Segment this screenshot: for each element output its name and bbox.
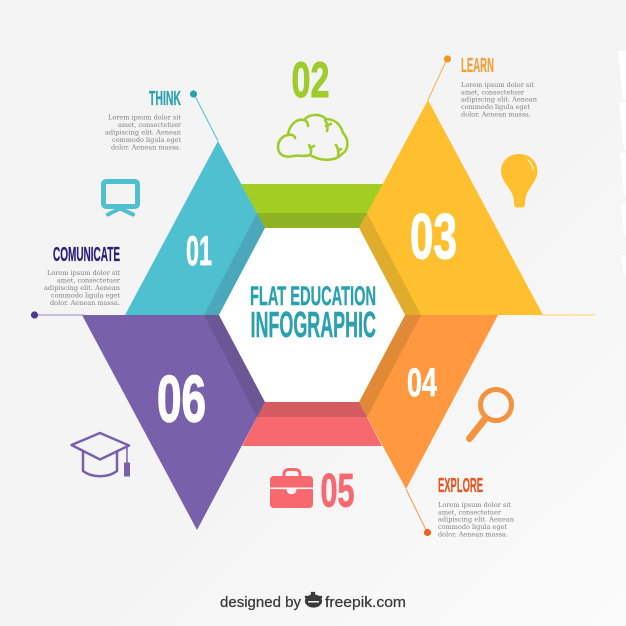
text: EXPLORE — [438, 475, 483, 497]
number 01: 01 — [186, 227, 212, 274]
text block: think: commodo ligula eget — [112, 136, 181, 144]
footer: attribution — [220, 592, 406, 611]
text block: communicate: adipiscing elit. Aenean — [44, 284, 121, 292]
connector: learn — [428, 55, 451, 100]
icon: freepik logo — [305, 592, 322, 608]
connector: think — [190, 90, 218, 141]
text block: explore: adipiscing elit. Aenean — [438, 516, 515, 524]
panel: 06 communicate purple triangle — [82, 315, 265, 530]
title — [250, 281, 376, 345]
connector: explore — [406, 489, 431, 536]
text block: think: adipiscing elit. Aenean — [105, 128, 182, 136]
text block: think: dolor. Aenean massa. — [111, 144, 181, 152]
text block: think: Lorem ipsum dolor sit — [108, 114, 181, 122]
number 04: 04 — [407, 361, 438, 405]
text block: learn: adipiscing elit. Aenean — [461, 96, 538, 104]
panel: 05 pink trapezoid — [242, 402, 382, 446]
number 05: 05 — [320, 464, 354, 516]
footer: attribution: freepik.com — [325, 595, 406, 611]
text block: learn: dolor. Aenean massa. — [461, 110, 531, 118]
text: LEARN — [461, 55, 494, 77]
heading: think: THINK — [149, 88, 181, 110]
text block: communicate: Lorem ipsum dolor sit — [47, 269, 120, 277]
text block: explore — [438, 501, 515, 538]
text block: explore: amet, consectetuer — [438, 508, 502, 516]
panel: 03 learn yellow triangle — [359, 100, 543, 315]
text block: explore: dolor. Aenean massa. — [438, 530, 508, 538]
text block: learn: commodo ligula eget — [461, 103, 530, 111]
title: FLAT EDUCATION — [250, 281, 376, 311]
icon: magnifier — [470, 390, 512, 438]
text block: explore: Lorem ipsum dolor sit — [438, 501, 511, 509]
text block: think: amet, consectetuer — [118, 121, 182, 129]
footer: attribution: designed by — [220, 595, 302, 611]
icon: presentation screen — [104, 182, 138, 214]
text block: communicate: dolor. Aenean massa. — [50, 299, 120, 307]
text block: think — [105, 114, 182, 152]
text block: learn: amet, consectetuer — [461, 88, 525, 96]
panel: 02 green trapezoid — [241, 184, 383, 228]
number 02: 02 — [292, 52, 330, 108]
icon: graduation cap — [72, 433, 130, 476]
text: INFOGRAPHIC — [250, 304, 376, 345]
text block: learn: Lorem ipsum dolor sit — [461, 81, 534, 89]
connector: communicate — [31, 311, 84, 319]
text block: learn — [461, 81, 538, 118]
yellow baseline extension — [540, 314, 595, 316]
icon: brain — [278, 115, 347, 160]
panel: 01 think teal triangle — [125, 141, 265, 315]
text: COMUNICATE — [53, 244, 120, 266]
text block: explore: commodo ligula eget — [438, 523, 507, 531]
center white hexagon — [219, 228, 405, 402]
number 03: 03 — [410, 200, 457, 272]
text block: communicate — [44, 269, 121, 307]
icon: briefcase — [270, 470, 313, 508]
text block: communicate: amet, consectetuer — [57, 276, 121, 284]
panel: 04 explore orange triangle — [359, 315, 498, 489]
icon: light bulb — [501, 154, 538, 208]
text block: communicate: commodo ligula eget — [51, 292, 120, 300]
number 06: 06 — [157, 362, 206, 436]
